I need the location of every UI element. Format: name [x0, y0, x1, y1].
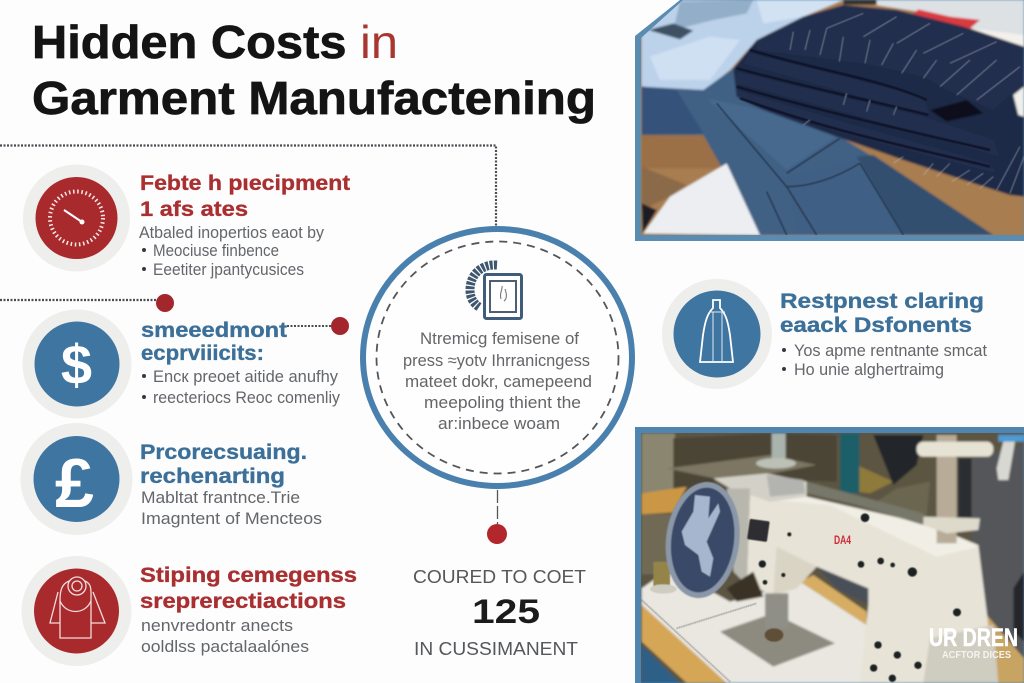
text: item 3 details: Imagntent of Mencteos: [141, 510, 322, 528]
text: central description: [403, 329, 592, 433]
text: right item details: Ho unie alghertraimg: [794, 361, 944, 379]
heading: item 4: [140, 564, 357, 613]
stat: 125: COURED TO COET: [413, 567, 586, 587]
text: item 1 details: Eeetiter jpantycusices: [153, 261, 304, 279]
connector: central circle to stat: [487, 490, 507, 544]
title: Hidden Costs in: [32, 16, 398, 68]
panel: right cost item: [662, 279, 987, 389]
heading: item 1: [140, 172, 350, 221]
stat: 125: 125: [472, 593, 540, 631]
heading: item 4: Stiping cemegenss: [140, 564, 357, 587]
text: item 4 details: nenvredontr anects: [141, 617, 293, 635]
icon: garment: [22, 556, 132, 666]
panel: central circle: [363, 229, 632, 486]
icon: dollar: $: [61, 333, 92, 396]
text: item 3 details: Mabltat frantnce.Trie: [141, 489, 300, 507]
text: item 3 details: [141, 489, 322, 528]
text: central description: meepoling thient the: [424, 393, 581, 412]
text: item 4 details: [141, 617, 309, 656]
photo: folded fabric: [630, 0, 1024, 245]
text: right item details: Yos apme rentnante smcat: [794, 342, 987, 360]
icon: gauge: [23, 164, 130, 272]
icon: bottle garment: [662, 279, 772, 389]
title: [32, 16, 596, 124]
text: central description: ar:inbece woam: [438, 414, 560, 433]
text: item 4 details: ooldlss pactalaalónes: [141, 638, 309, 656]
heading: right item: [780, 290, 984, 337]
text: central description: press ≈yotv Ihrranicngess: [403, 351, 590, 370]
photo: sewing machine: [630, 425, 1024, 683]
icon: pound: £: [55, 444, 94, 522]
text: item 2 details: [142, 368, 341, 407]
text: right item details: [782, 342, 987, 379]
panel: cost item 2: [22, 310, 349, 418]
label: photo watermark: ACFTOR DICES: [942, 650, 1011, 661]
text: item 2 details: Encк preoet aitide anufhy: [153, 368, 339, 386]
icon: gauge and frame: [470, 265, 522, 318]
connector: top dotted line into central circle: [0, 146, 496, 226]
heading: item 2: smeeedmont: [141, 319, 287, 342]
panel: cost item 4: [22, 556, 357, 666]
text: central description: Ntremicg femisene of: [420, 329, 579, 348]
stat: 125: [413, 567, 586, 659]
connector: left dotted line with red node: [0, 294, 174, 312]
text: item 1 details: Atbaled inopertios eaot by: [139, 224, 325, 242]
heading: item 4: sreprerectiactions: [140, 590, 346, 613]
text: central description: mateet dokr, camepeend: [405, 372, 592, 391]
heading: right item: eaack Dsfonents: [780, 314, 972, 337]
heading: item 3: Prcorecsuaing.: [140, 441, 307, 464]
title: Garment Manufactening: [32, 72, 596, 124]
heading: item 1: 1 afs ates: [140, 198, 248, 221]
text: item 1 details: Meociuse finbence: [153, 242, 279, 260]
connector: heading to red node: [287, 317, 349, 335]
icon: pound: [20, 423, 132, 535]
stat: 125: IN CUSSIMANENT: [414, 639, 578, 659]
panel: cost item 3: [20, 423, 322, 535]
heading: right item: Restpnest claring: [780, 290, 984, 313]
label: machine brand mark: DA4: [834, 533, 851, 547]
heading: item 2: [141, 319, 287, 365]
heading: item 3: rechenarting: [140, 465, 285, 488]
text: item 2 details: reecteriocs Reoc comenliy: [153, 389, 341, 407]
heading: item 2: ecprviiicits:: [141, 342, 264, 365]
text: item 1 details: [139, 224, 325, 279]
panel: cost item 1: [23, 164, 350, 279]
heading: item 3: [140, 441, 307, 488]
heading: item 1: Febte h pιecipment: [140, 172, 350, 195]
icon: dollar: [22, 310, 132, 418]
